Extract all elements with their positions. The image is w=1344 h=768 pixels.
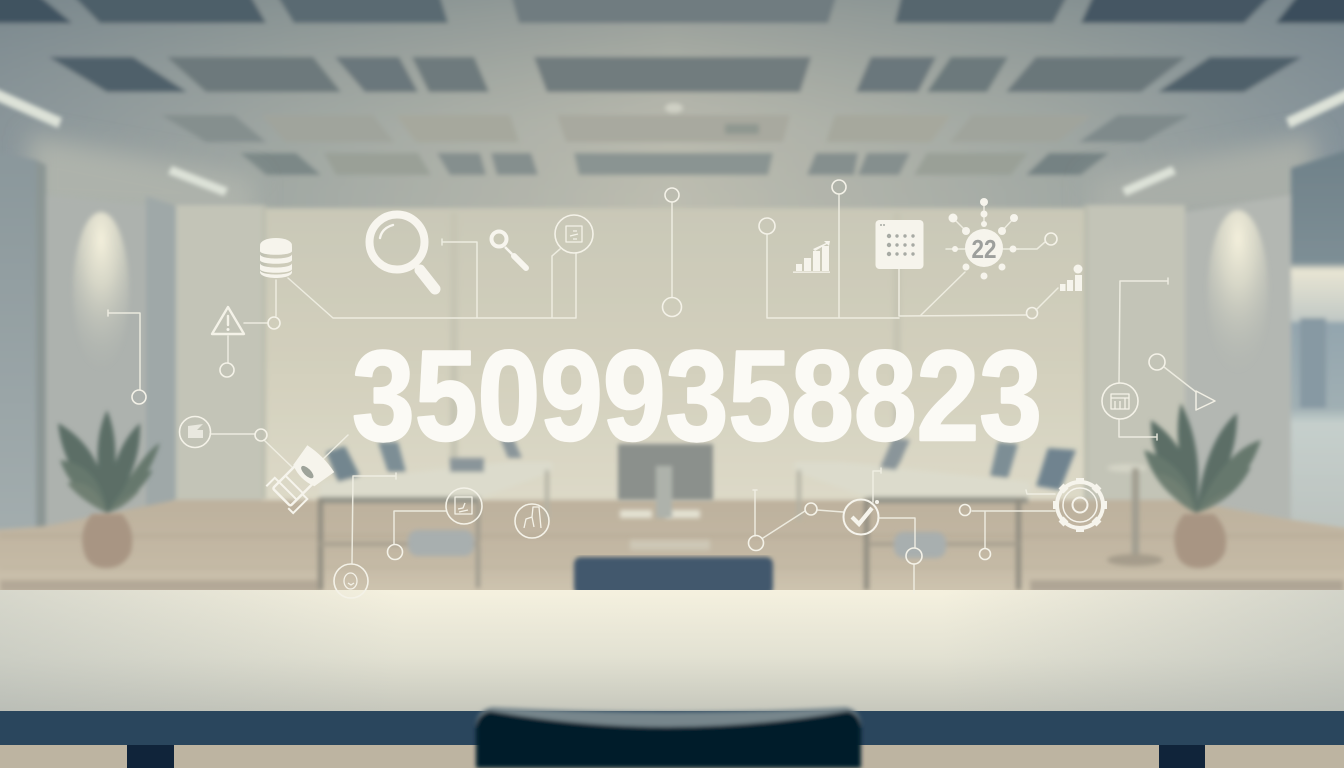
connector: gear line — [972, 490, 1055, 548]
connector: left bracket — [108, 310, 140, 390]
left plant — [58, 410, 160, 568]
icon: play triangle — [1196, 391, 1215, 410]
node: left bracket — [132, 390, 146, 404]
connector: main right line — [767, 194, 1026, 318]
node: check right — [906, 548, 922, 564]
connector: left trail — [753, 490, 843, 538]
connector: check to node — [873, 468, 915, 593]
icon: rising bar chart — [793, 241, 830, 273]
node: chart badge — [388, 544, 402, 560]
icon: hub with number 22 — [946, 198, 1018, 280]
connector: center vertical with node — [662, 188, 682, 316]
icon: check badge — [844, 500, 879, 534]
icon: calendar — [876, 220, 924, 269]
icon: signal bars — [1060, 264, 1082, 291]
node: warning — [220, 363, 234, 377]
node: left circle — [759, 218, 775, 234]
connector: node to signal bars — [1036, 288, 1058, 310]
connector: hub to node — [1018, 242, 1045, 249]
icon: mail badge — [180, 416, 210, 448]
node: top circle — [832, 180, 846, 194]
ceiling strip lights — [0, 88, 1344, 196]
icon: warning triangle — [212, 307, 244, 334]
node: signal — [1026, 308, 1038, 318]
icon: machine part — [266, 444, 336, 513]
node: gear lower — [980, 548, 990, 560]
node: mail — [255, 429, 267, 441]
foreground chair back — [574, 557, 773, 595]
icon: columns badge — [515, 504, 549, 538]
node: gear left — [960, 504, 970, 516]
walls — [0, 148, 1344, 540]
connector: chart badge to node — [394, 511, 446, 544]
node: database junction — [268, 317, 280, 329]
icon: gear — [1053, 478, 1107, 532]
icon: database — [260, 238, 292, 278]
node: triangle — [1149, 354, 1165, 370]
desks and chairs — [318, 438, 1076, 590]
connector: database to main line — [288, 239, 576, 318]
side table — [1107, 464, 1163, 566]
connector: database to warning — [228, 280, 276, 363]
node: trail start — [748, 536, 764, 550]
connector: mail to node — [210, 434, 348, 467]
connector: right bracket — [1119, 278, 1168, 440]
wall spotlights — [73, 210, 1268, 370]
connector: lower left bracket — [352, 473, 396, 563]
right pot — [1174, 514, 1226, 568]
monitor — [618, 444, 713, 518]
foreground chair — [476, 707, 861, 768]
node: trail middle — [805, 503, 817, 515]
network: lower left connectors and icons — [180, 416, 549, 598]
network: upper left connectors and icons — [108, 214, 593, 404]
icon: small magnifier — [492, 232, 526, 268]
right plant — [1144, 403, 1261, 568]
icon: hub with number 22: 22 — [972, 234, 996, 264]
connector: node to triangle — [1164, 367, 1196, 392]
floor — [0, 500, 1344, 598]
left pot — [82, 514, 132, 568]
network: lower right connectors and icons — [748, 468, 1107, 593]
icon: large magnifier — [370, 214, 435, 289]
ceiling — [0, 0, 1344, 230]
ceiling to wall soft transition — [30, 135, 1314, 225]
icon: report badge — [1102, 383, 1138, 419]
big number: 35099358823 — [352, 325, 1042, 468]
foreground table — [0, 590, 1344, 768]
network: upper right connectors and icons — [662, 180, 1215, 440]
icon: face badge — [334, 564, 368, 598]
icon: chart badge — [446, 488, 482, 524]
node: hub right — [1045, 233, 1057, 245]
icon: framed badge — [555, 215, 593, 253]
